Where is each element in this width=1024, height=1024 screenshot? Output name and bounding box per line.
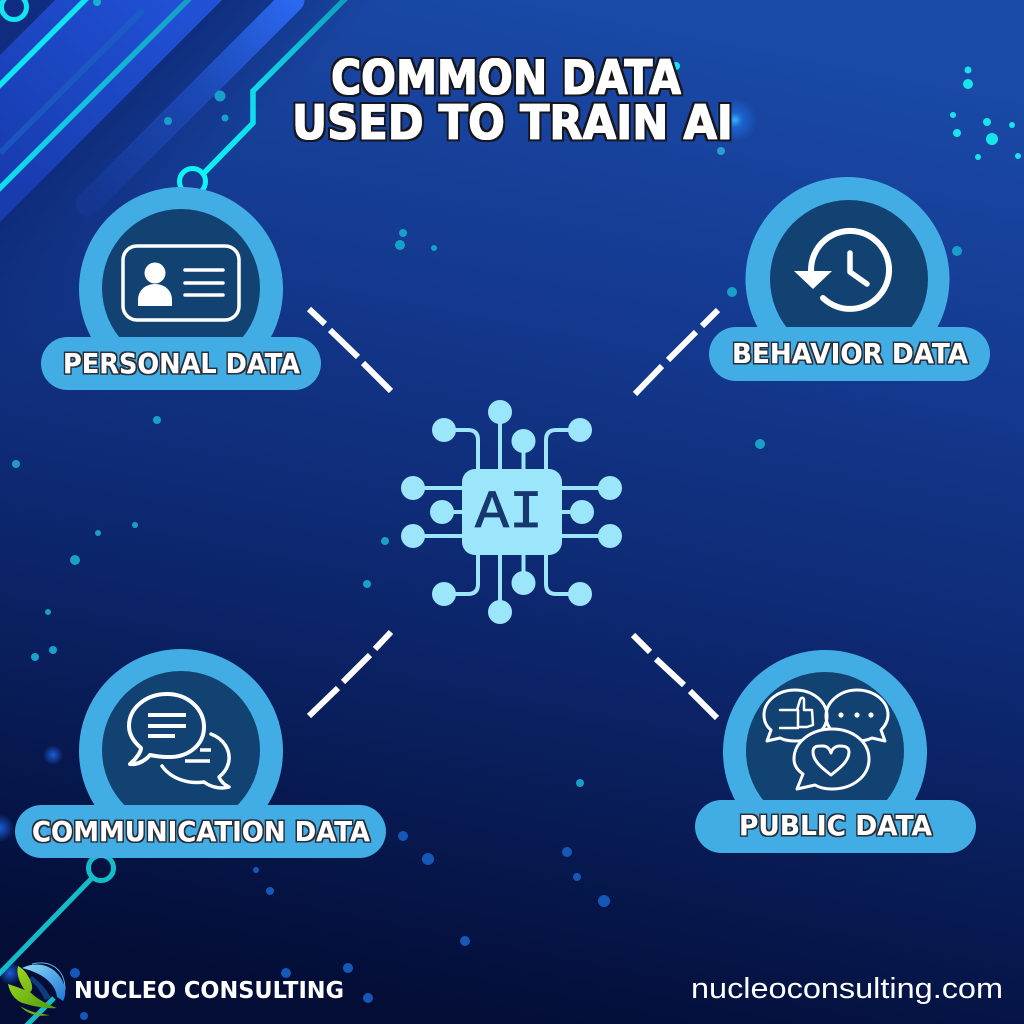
central AI chip icon: AI (475, 483, 543, 544)
panel: public data (695, 650, 976, 854)
label: personal data: PERSONAL DATA (63, 347, 300, 380)
panel: personal data (41, 187, 321, 391)
panel: behavior data (709, 177, 990, 381)
central AI chip icon (401, 400, 622, 624)
title: COMMON DATA (331, 51, 682, 106)
icon: social bubbles (764, 690, 888, 789)
connector: communication data (309, 632, 391, 716)
icon: chat bubbles (129, 694, 229, 788)
circuit line bottom left (0, 856, 114, 1024)
title: USED TO TRAIN AI (292, 96, 733, 151)
label: behavior data: BEHAVIOR DATA (732, 337, 968, 370)
icon: id card (123, 246, 239, 320)
icon: clock history (794, 231, 889, 309)
title (292, 51, 733, 151)
circuit lines top left (0, 0, 348, 194)
label: communication data: COMMUNICATION DATA (32, 815, 370, 848)
panel: communication data (15, 649, 386, 858)
logo: nucleo consulting (8, 963, 65, 1016)
connector: personal data (309, 309, 391, 391)
connector: public data (633, 635, 717, 718)
brand name: NUCLEO CONSULTING (74, 978, 344, 1004)
label: public data: PUBLIC DATA (739, 809, 932, 842)
connector: behavior data (635, 310, 718, 394)
website url: nucleoconsulting.com (691, 973, 1003, 1005)
